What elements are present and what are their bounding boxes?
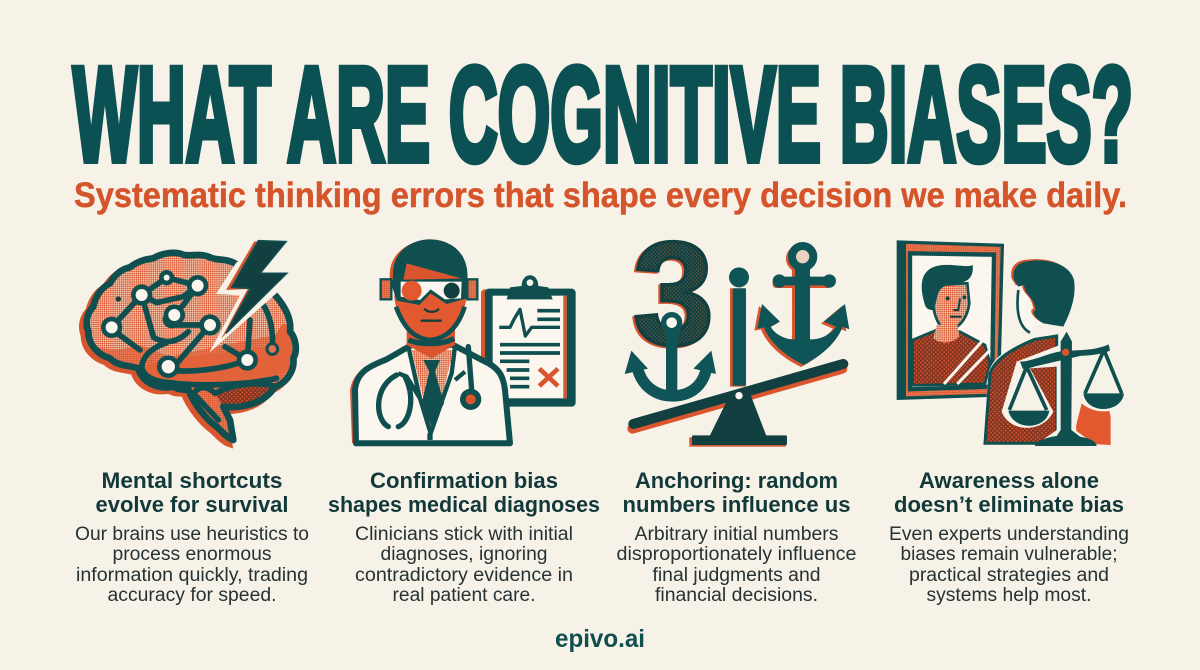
body: anchoring bbox=[616, 524, 856, 606]
doctor coat bbox=[350, 342, 510, 443]
seesaw bbox=[632, 364, 843, 447]
heading: awareness: Awareness alone bbox=[919, 468, 1099, 493]
body: anchoring: disproportionately influence bbox=[616, 544, 856, 565]
mirror bbox=[898, 242, 1002, 398]
body: awareness bbox=[889, 524, 1129, 606]
heading: anchoring bbox=[622, 468, 850, 517]
number three: 3 bbox=[631, 213, 712, 377]
column 1 text bbox=[75, 468, 309, 606]
icon: person at a mirror with scales bbox=[898, 242, 1128, 447]
body: anchoring: final judgments and bbox=[652, 565, 820, 586]
body: mental shortcuts: accuracy for speed. bbox=[108, 585, 276, 606]
body: mental shortcuts: Our brains use heuristics to bbox=[75, 524, 309, 545]
heading: awareness bbox=[894, 468, 1124, 517]
body: anchoring: Arbitrary initial numbers bbox=[634, 524, 838, 545]
heading: confirmation bias: shapes medical diagnoses bbox=[328, 492, 600, 517]
right anchor bbox=[754, 246, 849, 367]
heading: anchoring: numbers influence us bbox=[622, 492, 850, 517]
body: awareness: systems help most. bbox=[926, 585, 1092, 606]
scales of justice bbox=[1002, 332, 1128, 447]
column 3 text bbox=[616, 468, 856, 606]
body: awareness: biases remain vulnerable; bbox=[900, 544, 1118, 565]
icon: brain with lightning bolt bbox=[82, 241, 300, 444]
left anchor bbox=[625, 315, 716, 396]
person seen from behind bbox=[983, 259, 1112, 445]
icon: number three, anchors and seesaw bbox=[625, 212, 849, 447]
body: confirmation bias: Clinicians stick with initial bbox=[355, 524, 573, 545]
footer brand: epivo.ai bbox=[555, 625, 645, 653]
body: awareness: practical strategies and bbox=[909, 565, 1109, 586]
body: confirmation bias: real patient care. bbox=[392, 585, 536, 606]
body: mental shortcuts bbox=[75, 524, 309, 606]
body: awareness: Even experts understanding bbox=[889, 524, 1129, 545]
body: confirmation bias bbox=[355, 524, 573, 606]
heading: confirmation bias bbox=[328, 468, 600, 517]
column 2 text bbox=[328, 468, 600, 606]
subtitle: Systematic thinking errors that shape every decision we make daily. bbox=[74, 176, 1127, 215]
doctor head and goggles bbox=[381, 239, 477, 358]
number three: 3 bbox=[633, 212, 714, 376]
body: anchoring: financial decisions. bbox=[655, 585, 818, 606]
body: mental shortcuts: information quickly, trading bbox=[76, 565, 308, 586]
heading: mental shortcuts: Mental shortcuts bbox=[102, 468, 282, 493]
body: confirmation bias: contradictory evidence in bbox=[355, 565, 573, 586]
clipboard bbox=[481, 275, 576, 407]
icon: doctor with tinted goggles and clipboard bbox=[350, 239, 576, 443]
infographic canvas bbox=[70, 63, 1131, 652]
column 4 text bbox=[889, 468, 1129, 606]
centre post bbox=[729, 267, 749, 387]
heading: anchoring: Anchoring: random bbox=[635, 468, 838, 493]
body: mental shortcuts: process enormous bbox=[112, 544, 272, 565]
heading: mental shortcuts: evolve for survival bbox=[96, 492, 288, 517]
heading: confirmation bias: Confirmation bias bbox=[370, 468, 558, 493]
body: confirmation bias: diagnoses, ignoring bbox=[380, 544, 548, 565]
heading: mental shortcuts bbox=[96, 468, 288, 517]
heading: awareness: doesn’t eliminate bias bbox=[894, 492, 1124, 517]
